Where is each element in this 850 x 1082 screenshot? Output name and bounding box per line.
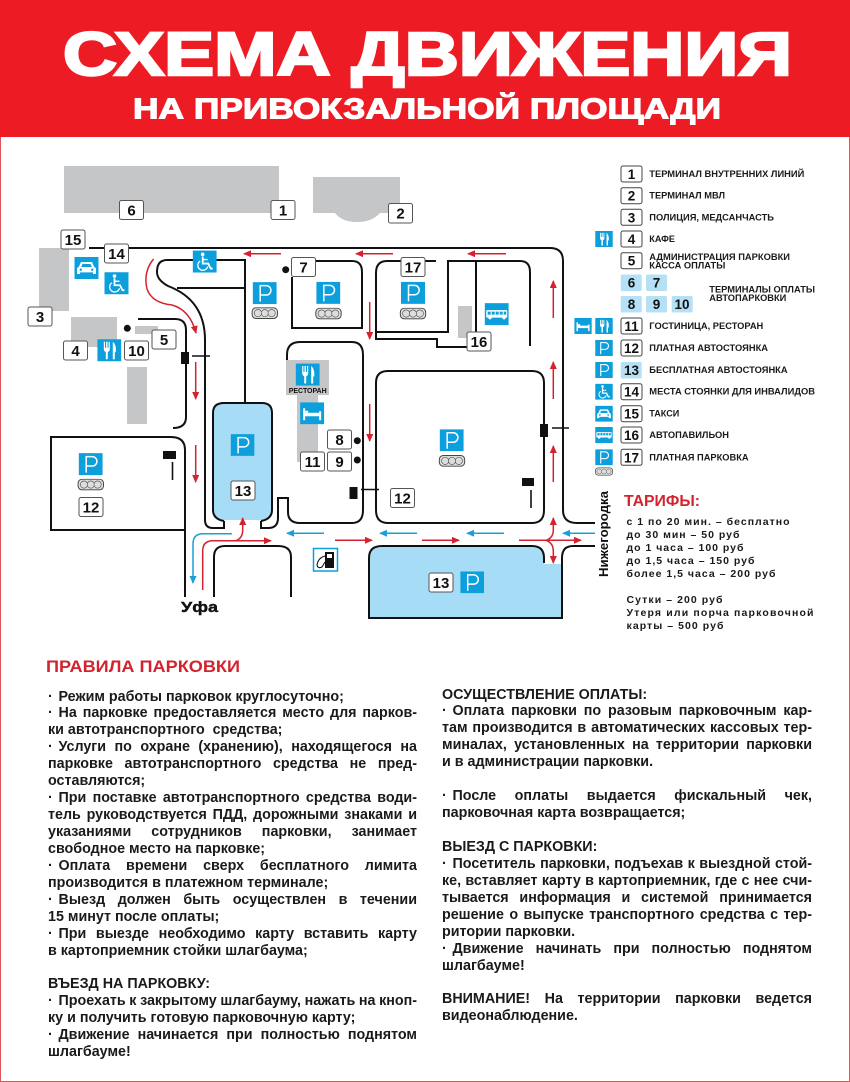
city label: Ufa: Уфа xyxy=(181,599,219,616)
legend captions: АВТОПАРКОВКИ xyxy=(709,293,786,303)
entry rules: Проехать к закрытому шлагбауму, нажать на кноп- xyxy=(58,993,417,1009)
tariffs: до 1 часа – 100 руб xyxy=(626,542,744,554)
legend captions: ПЛАТНАЯ ПАРКОВКА xyxy=(649,452,749,462)
legend numbers: 9 xyxy=(653,297,660,312)
payment rules: Оплата парковки по разовым парковочным кар- xyxy=(452,703,812,719)
map numbers: 2 xyxy=(396,206,405,222)
buildings xyxy=(39,166,472,462)
map numbers: 1 xyxy=(279,202,287,220)
map numbers: 3 xyxy=(36,309,44,326)
text block: parking rules left column xyxy=(48,688,417,1060)
general rules: указаниями сотрудников парковки, занимает xyxy=(48,824,417,840)
tariffs: с 1 по 20 мин. – бесплатно xyxy=(626,516,790,528)
legend numbers: 6 xyxy=(628,276,636,291)
legend captions: ТЕРМИНАЛ МВЛ xyxy=(649,191,725,201)
map and legend graphic xyxy=(28,166,816,676)
map numbers: 14 xyxy=(108,246,125,263)
legend numbers: 8 xyxy=(628,297,636,312)
payment rules: там производится в автоматических кассовых тер- xyxy=(442,720,812,736)
tariffs heading: ТАРИФЫ: xyxy=(624,493,700,510)
rules heading: ПРАВИЛА ПАРКОВКИ xyxy=(46,657,240,676)
general rules: Режим работы парковок круглосуточно; xyxy=(58,688,344,704)
gates and barriers xyxy=(163,352,569,508)
payment rules: · xyxy=(442,788,447,804)
legend captions: БЕСПЛАТНАЯ АВТОСТОЯНКА xyxy=(649,365,788,375)
entry rules: ку и получить готовую парковочную карту; xyxy=(48,1010,355,1026)
general rules: · xyxy=(48,688,53,704)
map numbers: 4 xyxy=(71,343,80,360)
map numbers: 6 xyxy=(127,202,136,220)
free parking lot fills xyxy=(213,403,562,618)
exit rules: шлагбауме! xyxy=(442,958,525,974)
legend icons xyxy=(574,231,613,475)
exit rules: Движение начинать при полностью поднятом xyxy=(452,941,812,957)
attention note xyxy=(442,991,812,1024)
legend terminal boxes xyxy=(621,274,693,378)
exit rules: ВЫЕЗД С ПАРКОВКИ: xyxy=(442,839,597,855)
general rules: При выезде необходимо карту вставить карту xyxy=(58,926,417,942)
payment rules: После оплаты выдается фискальный чек, xyxy=(452,788,812,804)
legend captions xyxy=(649,168,816,462)
payment rules xyxy=(442,686,812,821)
entry rules: · xyxy=(48,1027,53,1043)
legend captions: КАССА ОПЛАТЫ xyxy=(649,260,725,270)
payment rules: и в администрации парковки. xyxy=(442,754,653,770)
general rules: · xyxy=(48,790,53,806)
exit rules: ке, вставляет карту в картоприемник, где с нее счи- xyxy=(442,873,812,889)
legend captions: МЕСТА СТОЯНКИ ДЛЯ ИНВАЛИДОВ xyxy=(649,387,816,397)
payment rules: парковочная карта возвращается; xyxy=(442,805,685,821)
entry rules: · xyxy=(48,993,53,1009)
exit rules: · xyxy=(442,941,447,957)
entry rules: шлагбауме! xyxy=(48,1044,131,1060)
general rules: парковке автотранспортного средства не пред- xyxy=(48,756,417,772)
tariffs xyxy=(624,493,814,632)
legend numbers: 17 xyxy=(624,450,639,465)
legend captions: ТАКСИ xyxy=(649,409,679,419)
map numbers: 11 xyxy=(305,454,320,471)
tariffs: до 1,5 часа – 150 руб xyxy=(626,555,755,567)
general rules: · xyxy=(48,892,53,908)
general rules: На парковке предоставляется место для парков- xyxy=(58,705,417,721)
legend captions: АДМИНИСТРАЦИЯ ПАРКОВКИ xyxy=(649,252,790,262)
restaurant label: РЕСТОРАН xyxy=(289,388,327,395)
map numbers: 16 xyxy=(471,334,487,351)
legend numbers: 4 xyxy=(628,232,636,247)
general rules: тель руководствуется ПДД, дорожными знаками и xyxy=(48,807,417,823)
legend numbers: 3 xyxy=(628,210,636,225)
entry rules: ВЪЕЗД НА ПАРКОВКУ: xyxy=(48,976,210,992)
tariffs: Сутки – 200 руб xyxy=(626,594,723,606)
map numbers xyxy=(36,202,487,592)
legend numbers: 7 xyxy=(653,276,660,291)
legend captions: ПОЛИЦИЯ, МЕДСАНЧАСТЬ xyxy=(649,212,775,222)
map numbers: 17 xyxy=(405,260,421,276)
attention note: видеонаблюдение. xyxy=(442,1008,578,1024)
legend numbers: 16 xyxy=(624,428,639,443)
general rules xyxy=(48,688,417,959)
city label: Nizhegorodka: Нижегородка xyxy=(597,490,611,577)
tariffs: карты – 500 руб xyxy=(626,620,724,632)
exit rules: · xyxy=(442,856,447,872)
general rules: Услуги по охране (хранению), находящегося на xyxy=(58,739,417,755)
general rules: При поставке автотранспортного средства води- xyxy=(58,790,417,806)
road lines xyxy=(51,248,595,618)
tariffs: более 1,5 часа – 200 руб xyxy=(626,568,776,580)
tariffs: до 30 мин – 50 руб xyxy=(626,529,740,541)
legend numbers: 11 xyxy=(624,319,639,334)
legend numbers xyxy=(624,167,690,465)
tariffs: Утеря или порча парковочной xyxy=(626,607,814,619)
legend captions: ТЕРМИНАЛЫ ОПЛАТЫ xyxy=(709,284,815,294)
legend captions: ТЕРМИНАЛ ВНУТРЕННИХ ЛИНИЙ xyxy=(649,168,804,179)
legend numbers: 13 xyxy=(624,363,639,378)
map number boxes xyxy=(28,200,491,592)
legend numbers: 15 xyxy=(624,407,639,422)
exit rules: ритории парковки. xyxy=(442,924,575,940)
legend numbers: 12 xyxy=(624,341,639,356)
exit rules xyxy=(442,839,812,974)
legend captions: ПЛАТНАЯ АВТОСТОЯНКА xyxy=(649,343,769,353)
map numbers: 12 xyxy=(83,500,99,516)
map numbers: 13 xyxy=(433,575,449,592)
general rules: оставляются; xyxy=(48,773,145,789)
red traffic arrows xyxy=(146,254,581,590)
exit rules: Посетитель парковки, подъехав к выездной стой- xyxy=(452,856,812,872)
legend numbers: 1 xyxy=(628,167,636,182)
legend number boxes xyxy=(621,166,642,465)
legend numbers: 14 xyxy=(624,385,639,400)
payment rules: ОСУЩЕСТВЛЕНИЕ ОПЛАТЫ: xyxy=(442,686,647,702)
general rules: производится в платежном терминале; xyxy=(48,875,328,891)
legend captions: АВТОПАВИЛЬОН xyxy=(649,430,729,440)
icon: fuel station xyxy=(314,548,338,571)
legend numbers: 2 xyxy=(628,189,635,204)
general rules: 15 минут после оплаты; xyxy=(48,909,219,925)
text block: parking rules right column xyxy=(442,686,812,1024)
subtitle: НА ПРИВОКЗАЛЬНОЙ ПЛОЩАДИ xyxy=(133,92,721,126)
general rules: · xyxy=(48,858,53,874)
map numbers: 9 xyxy=(335,454,344,471)
map numbers: 13 xyxy=(235,483,251,500)
attention note: ВНИМАНИЕ! На территории парковки ведется xyxy=(442,991,812,1007)
legend captions: КАФЕ xyxy=(649,234,675,244)
icons on map xyxy=(74,251,509,593)
legend numbers: 5 xyxy=(628,254,636,269)
general rules: · xyxy=(48,926,53,942)
map numbers: 8 xyxy=(335,432,344,449)
legend captions: ГОСТИНИЦА, РЕСТОРАН xyxy=(649,321,763,331)
map numbers: 12 xyxy=(394,490,411,508)
terminal dots xyxy=(124,266,361,464)
blue traffic arrows xyxy=(193,533,595,583)
title: СХЕМА ДВИЖЕНИЯ xyxy=(63,20,792,88)
general rules: свободное место на парковке; xyxy=(48,841,265,857)
payment rules: миналах, установленных на территории парковки xyxy=(442,737,812,753)
entry rules xyxy=(48,976,417,1060)
legend numbers: 10 xyxy=(674,297,690,312)
entry rules: Движение начинается при полностью поднятом xyxy=(58,1027,417,1043)
payment rules: · xyxy=(442,703,447,719)
exit rules: решение о выпуске транспортного средства с тер- xyxy=(442,907,812,923)
general rules: Выезд должен быть осуществлен в течении xyxy=(58,892,417,908)
map numbers: 15 xyxy=(65,232,81,249)
map numbers: 7 xyxy=(299,260,308,276)
exit rules: тывается информация и системой принимается xyxy=(442,890,812,906)
general rules: · xyxy=(48,739,53,755)
general rules: в картоприемник стойки шлагбаума; xyxy=(48,943,308,959)
map numbers: 10 xyxy=(128,343,145,360)
legend xyxy=(574,166,816,475)
general rules: · xyxy=(48,705,53,721)
general rules: ки автотранспортного средства; xyxy=(48,722,282,738)
map numbers: 5 xyxy=(160,332,168,349)
header banner xyxy=(0,0,850,137)
general rules: Оплата времени сверх бесплатного лимита xyxy=(58,858,417,874)
